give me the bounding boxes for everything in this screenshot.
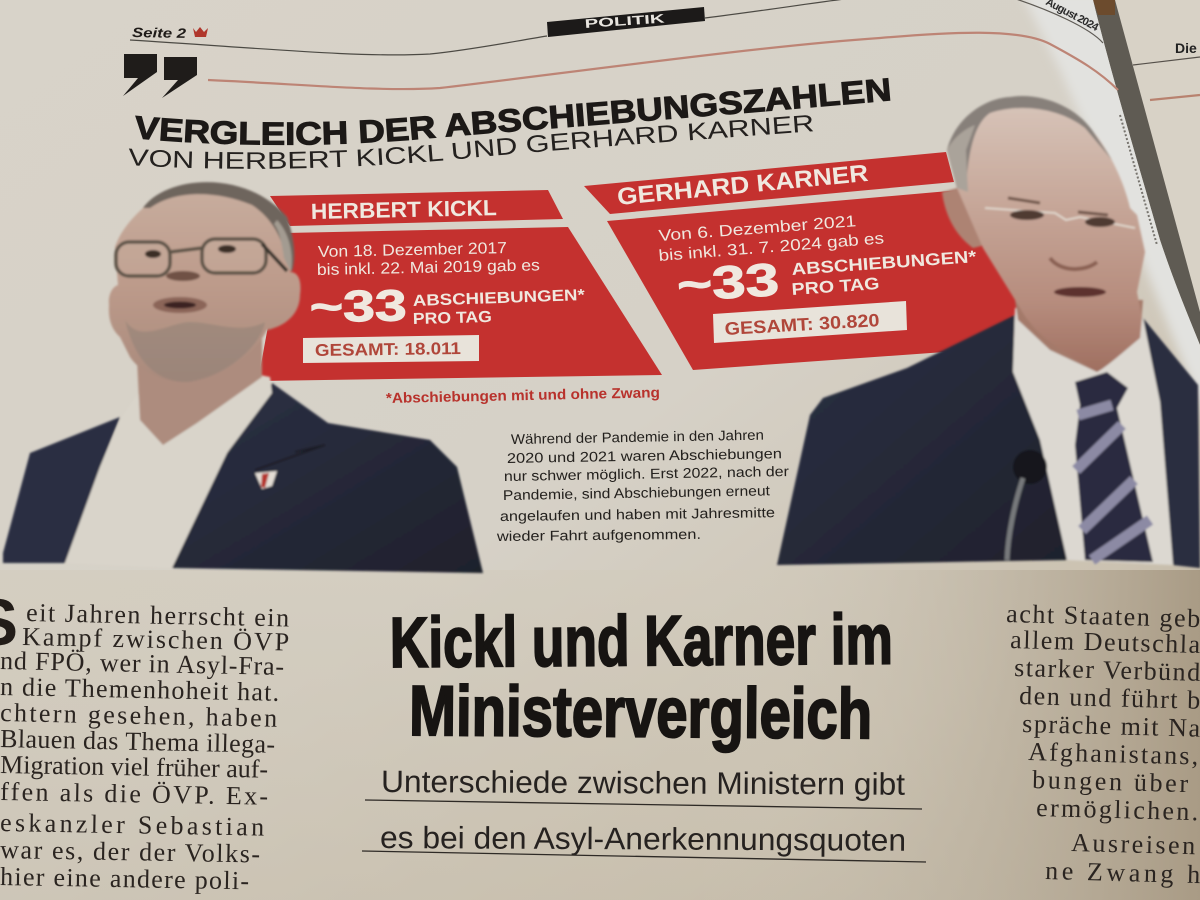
microphone	[1007, 450, 1047, 560]
article column: left: nd FPÖ, wer in Asyl-Fra-	[0, 646, 284, 681]
headline	[390, 600, 893, 754]
stubble	[125, 320, 265, 382]
section label: POLITIK	[584, 11, 665, 31]
article column: left	[0, 585, 289, 895]
subheadline	[380, 764, 906, 858]
ear	[942, 188, 985, 248]
article column: right: ermöglichen.	[1036, 793, 1199, 826]
panel: Gerhard Karner statistics: bis inkl. 31. 7. 2024 gab es	[658, 230, 885, 265]
neck	[137, 335, 262, 445]
panel: Herbert Kickl statistics: PRO TAG	[413, 309, 492, 328]
page header	[130, 0, 1103, 55]
decorative double red rule	[208, 33, 1118, 90]
total badge: GESAMT: 30.820	[724, 310, 880, 339]
jacket	[777, 315, 1067, 565]
head	[109, 184, 301, 382]
panel: Gerhard Karner statistics: PRO TAG	[791, 274, 880, 299]
shirt	[1013, 308, 1173, 565]
jacket	[3, 417, 120, 563]
panel: Gerhard Karner statistics: ABSCHIEBUNGEN*	[791, 247, 977, 279]
nose	[1050, 258, 1097, 269]
article column: right: allem Deutschla	[1010, 625, 1200, 659]
section label	[547, 7, 705, 37]
article column: left: eskanzler Sebastian	[0, 808, 264, 842]
total badge: GESAMT: 18.011	[315, 339, 461, 360]
nose	[166, 271, 200, 281]
article column: left: eit Jahren herrscht ein	[26, 598, 289, 633]
shirt	[65, 375, 272, 568]
glasses	[116, 239, 287, 276]
lapel pin	[255, 471, 277, 489]
text block: pandemic note: Während der Pandemie in den Jahren	[511, 427, 764, 447]
subheadline: es bei den Asyl-Anerkennungsquoten	[380, 820, 906, 858]
text block: pandemic note	[496, 427, 789, 544]
eyes	[145, 250, 161, 258]
article column: right: bungen über	[1032, 765, 1189, 798]
article column: left: n die Themenhoheit hat.	[0, 672, 279, 707]
article column: left: hier eine andere poli-	[0, 862, 249, 895]
panel: Gerhard Karner statistics: GERHARD KARNER	[616, 160, 869, 211]
panel header	[584, 152, 954, 214]
panel: Gerhard Karner statistics: Von 6. Dezember 2021	[658, 213, 857, 245]
hair	[143, 182, 294, 272]
hair	[947, 96, 1112, 190]
article column: right: spräche mit Na	[1022, 709, 1200, 743]
eyebrows	[1008, 198, 1108, 215]
article column: right	[1006, 599, 1200, 889]
panel: Herbert Kickl statistics: ~33	[309, 281, 407, 332]
mouth	[1054, 287, 1106, 297]
neck	[1015, 300, 1143, 372]
article column: right: ne Zwang h	[1045, 856, 1200, 889]
icon: quotation marks	[123, 54, 197, 98]
text block: pandemic note: 2020 und 2021 waren Abschiebungen	[507, 445, 782, 466]
subheadline: Unterschiede zwischen Ministern gibt	[381, 764, 906, 802]
total badge	[303, 335, 479, 363]
text block: pandemic note: angelaufen und haben mit Jahresmitte	[500, 504, 775, 524]
panel header	[270, 190, 563, 226]
article column: left: war es, der der Volks-	[0, 835, 260, 869]
glasses	[985, 208, 1135, 228]
article column: left: Blauen das Thema illega-	[0, 724, 275, 759]
title: VERGLEICH DER ABSCHIEBUNGSZAHLEN	[135, 78, 890, 146]
icon: crown	[193, 27, 208, 37]
second sheet heading: Die	[1175, 40, 1197, 56]
panel: Herbert Kickl statistics: Von 18. Dezember 2017	[318, 240, 507, 261]
headline: Kickl und Karner im	[390, 600, 893, 683]
text block: pandemic note: wieder Fahrt aufgenommen.	[496, 526, 701, 544]
panel: Gerhard Karner statistics	[584, 152, 1040, 370]
panel: Herbert Kickl statistics: HERBERT KICKL	[311, 195, 497, 224]
head	[947, 96, 1145, 372]
text block: pandemic note: Pandemie, sind Abschiebungen erneut	[503, 482, 770, 503]
article column: left: chtern gesehen, haben	[0, 698, 277, 733]
article column: right: starker Verbünd	[1014, 653, 1200, 687]
article column: left: Migration viel früher auf-	[0, 750, 268, 784]
article column: right: acht Staaten geb	[1006, 599, 1200, 633]
tie	[1075, 372, 1153, 562]
text block: pandemic note: nur schwer möglich. Erst 2022, nach der	[504, 463, 789, 484]
headline: Ministervergleich	[409, 672, 872, 754]
article column: right: den und führt b	[1019, 681, 1200, 715]
article column: right: Ausreisen	[1071, 828, 1196, 860]
panel body	[258, 227, 662, 381]
panel body	[607, 190, 1040, 370]
article column: left: Kampf zwischen ÖVP	[22, 622, 289, 657]
panel: Gerhard Karner statistics: ~33	[676, 253, 780, 311]
panel: Herbert Kickl statistics: bis inkl. 22. Mai 2019 gab es	[317, 257, 540, 279]
panel: Herbert Kickl statistics: ABSCHIEBUNGEN*	[413, 287, 586, 310]
subtitle: VON HERBERT KICKL UND GERHARD KARNER	[128, 115, 814, 169]
article column: right: Afghanistans,	[1028, 737, 1199, 770]
lapel detail	[255, 445, 325, 470]
article column: left: ffen als die ÖVP. Ex-	[0, 777, 268, 811]
page number: Seite 2	[132, 25, 187, 41]
footnote: *Abschiebungen mit und ohne Zwang	[386, 385, 660, 407]
photo: Gerhard Karner	[777, 96, 1200, 568]
eyes	[1010, 210, 1044, 220]
panel: Herbert Kickl statistics	[258, 190, 662, 381]
total badge	[713, 301, 907, 343]
photo: Herbert Kickl	[3, 182, 483, 573]
mouth	[153, 297, 207, 313]
